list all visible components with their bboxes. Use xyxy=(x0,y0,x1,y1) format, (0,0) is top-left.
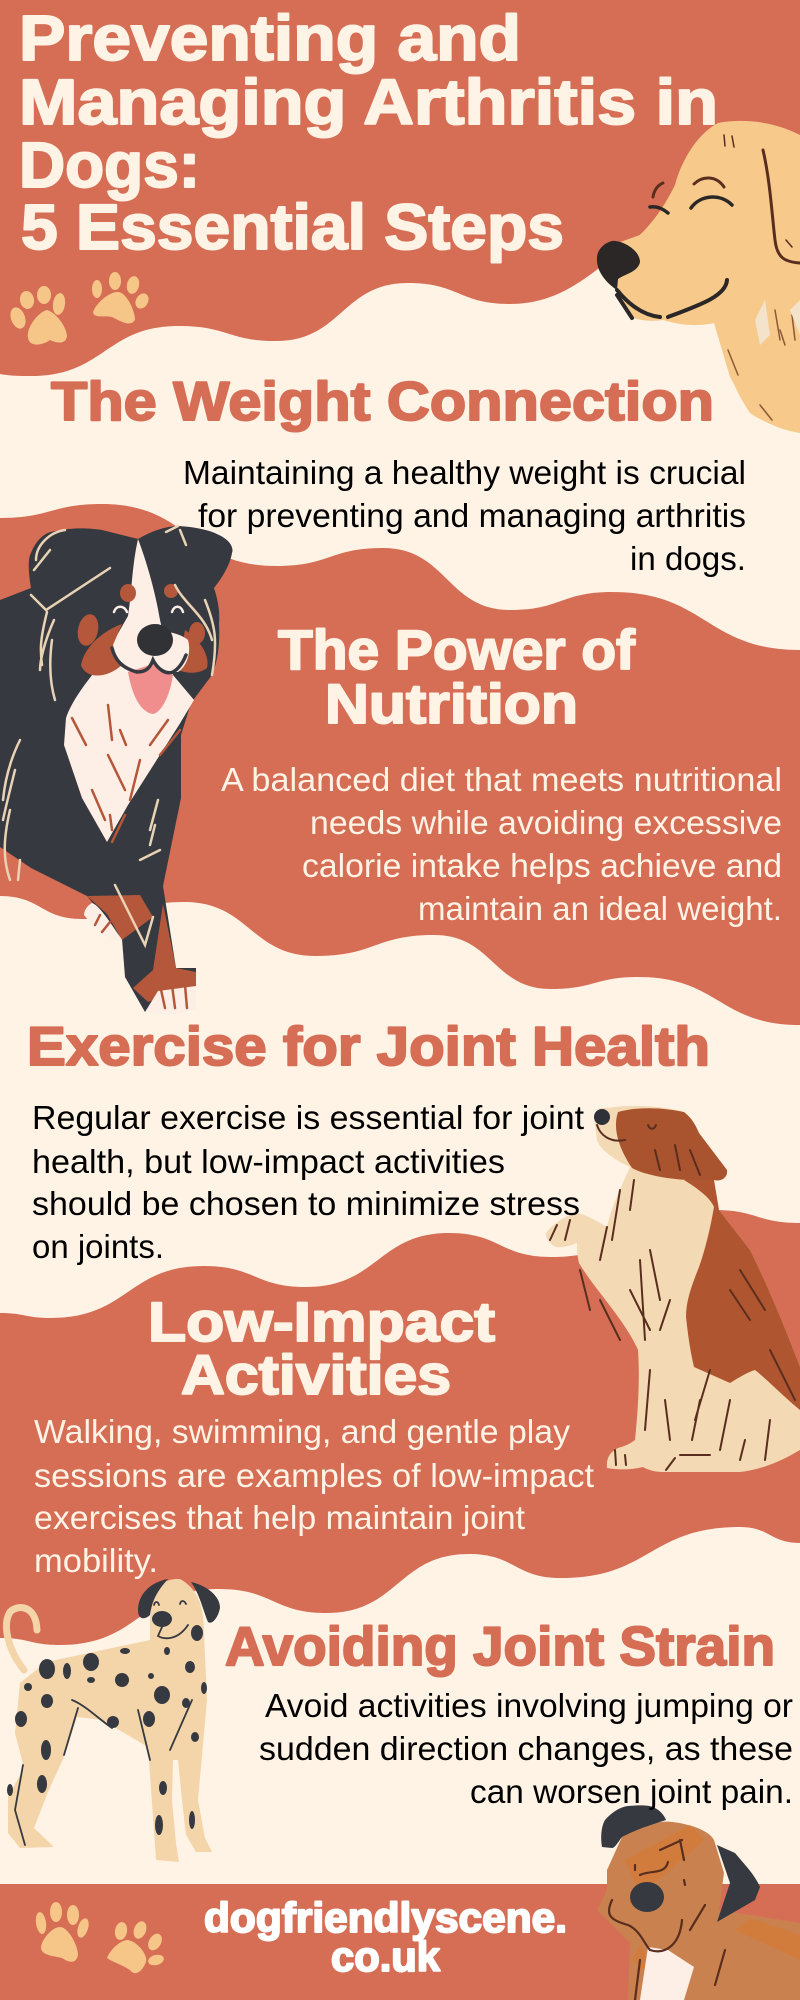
text block: exercise xyxy=(32,1099,584,1265)
icon: dalmatian dog xyxy=(6,1579,220,1862)
icon: spaniel dog xyxy=(546,1106,800,1472)
title: 5 Essential Steps xyxy=(21,191,564,263)
panel: low-impact wave xyxy=(0,1210,800,1645)
text block: exercise: on joints. xyxy=(32,1228,164,1265)
heading: avoiding joint strain: Avoiding Joint Strain xyxy=(225,1615,775,1677)
icon: golden dog xyxy=(597,121,800,433)
text block: low-impact: Walking, swimming, and gentle play xyxy=(34,1413,571,1450)
text block: low-impact xyxy=(34,1413,594,1579)
title: Managing Arthritis in xyxy=(19,66,718,138)
footer website: dogfriendlyscene. xyxy=(204,1894,567,1941)
text block: nutrition xyxy=(221,761,782,927)
text block: joint strain xyxy=(259,1687,793,1810)
heading: the power of nutrition: Nutrition xyxy=(325,672,578,735)
heading: the weight connection: The Weight Connection xyxy=(51,370,714,432)
heading: exercise for joint health: Exercise for Joint Health xyxy=(27,1015,710,1077)
text block: joint strain: Avoid activities involving jumping or xyxy=(265,1687,793,1724)
text block: weight: Maintaining a healthy weight is crucial xyxy=(183,454,746,491)
text block: low-impact: sessions are examples of low-impact xyxy=(34,1457,594,1494)
title: Dogs: xyxy=(19,129,200,201)
text block: nutrition: calorie intake helps achieve and xyxy=(302,847,782,884)
heading: low-impact activities: Low-Impact xyxy=(148,1290,495,1353)
icon: bernese dog xyxy=(0,526,232,1014)
footer website xyxy=(204,1894,567,1980)
text block: exercise: Regular exercise is essential for joint xyxy=(32,1099,584,1136)
text block: weight: for preventing and managing arthritis xyxy=(198,497,746,534)
icon: paw 2 xyxy=(92,272,151,323)
text block: exercise: should be chosen to minimize stress xyxy=(32,1185,580,1222)
text block: weight: in dogs. xyxy=(630,540,746,577)
text block: low-impact: mobility. xyxy=(34,1542,158,1579)
panel: footer band xyxy=(0,1884,800,2000)
heading: the power of nutrition: The Power of xyxy=(278,618,635,681)
text block: weight xyxy=(183,454,746,577)
panel: title wave xyxy=(0,0,800,376)
title: Preventing and xyxy=(19,2,521,74)
text block: nutrition: maintain an ideal weight. xyxy=(418,890,782,927)
text block: exercise: health, but low-impact activities xyxy=(32,1143,505,1180)
icon: paw 1 xyxy=(8,286,67,345)
panel: nutrition wave xyxy=(0,504,800,1025)
icon: paw 4 xyxy=(107,1919,165,1973)
text block: joint strain: can worsen joint pain. xyxy=(470,1773,793,1810)
heading: low-impact activities: Activities xyxy=(181,1343,451,1406)
heading: low-impact activities xyxy=(148,1290,495,1406)
text block: low-impact: exercises that help maintain joint xyxy=(34,1499,525,1536)
title xyxy=(19,2,718,263)
text block: nutrition: needs while avoiding excessive xyxy=(310,804,782,841)
text block: nutrition: A balanced diet that meets nutritional xyxy=(221,761,782,798)
text block: joint strain: sudden direction changes, as these xyxy=(259,1730,793,1767)
icon: boxer dog xyxy=(597,1805,800,2000)
heading: the power of nutrition xyxy=(278,618,635,735)
icon: paw 3 xyxy=(35,1902,91,1962)
footer website: co.uk xyxy=(331,1933,441,1980)
